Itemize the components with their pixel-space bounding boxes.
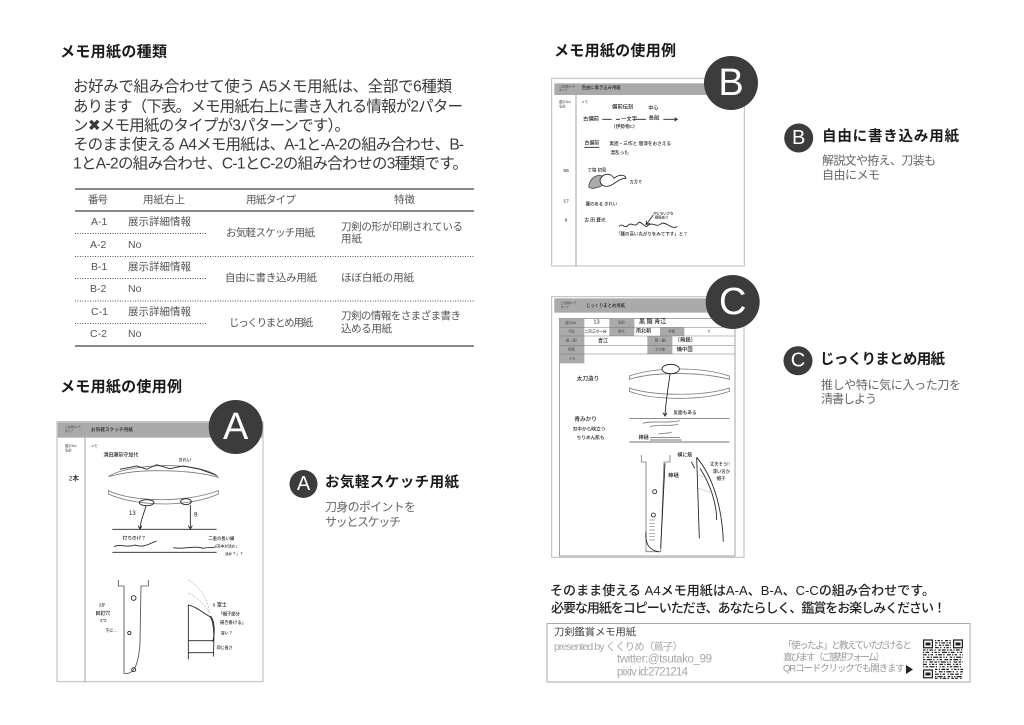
- handwritten notes: 腰のある きれい: [586, 200, 618, 207]
- handwritten notes: （伊勢物C）: [611, 123, 638, 130]
- label: C thorough summary paper: C: [791, 350, 805, 372]
- credit box: 喜びます（ご感想フォーム）: [783, 652, 885, 664]
- label: B free writing paper: 自由にメモ: [822, 168, 880, 182]
- sketch: tang and tip: 同じ長さ: [217, 644, 233, 650]
- handwritten notes: 17: [563, 199, 569, 205]
- credit box: 刀剣鑑賞メモ用紙: [554, 626, 637, 638]
- panel: sample paper A: メモ: [91, 444, 98, 448]
- sketch: tang and tip: 棒樋: [668, 471, 679, 479]
- QR code: [923, 640, 963, 678]
- closing note: そのまま使える A4メモ用紙はA-A、B-A、C-Cの組み合わせです。: [550, 583, 935, 598]
- panel: sample paper C: タイプ: [561, 305, 569, 309]
- table of paper types: 自由に書き込み用紙: [225, 271, 318, 284]
- handwritten notes: 実直・三作と 個漆をおさえる: [609, 140, 671, 147]
- intro paragraph: あります（下表。メモ用紙右上に書き入れる情報が2パター: [73, 98, 463, 116]
- form fields: 南北朝: [636, 328, 651, 335]
- credit box: 「使ったよ」と教えていただけると: [783, 640, 912, 652]
- sketch: blades: 反面もある: [673, 409, 697, 416]
- handwritten notes: 混乱った: [610, 149, 629, 156]
- form fields: 所蔵: [568, 346, 575, 351]
- panel: sample paper A: 2本: [69, 473, 79, 482]
- handwritten notes: 中心: [648, 104, 658, 111]
- intro paragraph: ン✖メモ用紙のタイプが3パターンです）。: [73, 116, 350, 134]
- handwritten notes: 「腰の高い丸がりをみて下す」と？: [616, 230, 688, 237]
- label: B free writing paper: 解説文や拵え、刀装も: [822, 152, 936, 168]
- table of paper types: じっくりまとめ用紙: [229, 316, 314, 329]
- table of paper types: ほぼ白紙の用紙: [341, 271, 414, 284]
- form fields: 黒 鎺 青江: [639, 318, 666, 326]
- sketch: tang and tip: 目釘穴: [95, 610, 110, 617]
- label: A quick sketch paper: [290, 470, 460, 529]
- panel: sample paper B: タイプ: [559, 88, 567, 92]
- table of paper types: 刀剣の形が印刷されている: [341, 220, 463, 233]
- table of paper types: B-2: [90, 283, 106, 295]
- panel: sample paper B: 自由に書き込み用紙: [582, 84, 621, 91]
- form fields: 展示No: [565, 320, 576, 325]
- sketch: blades with arrows: 二重の長い線: [208, 535, 235, 542]
- sketch: tang and tip: 横に筋: [677, 451, 692, 458]
- handwritten notes: カガミ: [629, 178, 642, 185]
- panel: sample paper A: 展示No/: [65, 443, 77, 448]
- sketch: tang and tip: 6 富士: [213, 601, 227, 608]
- sketch: tang and tip: 深い？: [221, 629, 233, 635]
- panel: sample paper A: きれい: [178, 456, 192, 463]
- panel: sample paper A: 二次資料メモ: [65, 425, 81, 429]
- table of paper types: B-1: [91, 261, 108, 273]
- badge C: [706, 275, 760, 329]
- sketch: tang and tip: 帽子: [717, 475, 726, 482]
- handwritten notes: 古備前: [583, 114, 600, 122]
- form fields: 名前: [618, 320, 625, 325]
- closing note: [550, 583, 946, 616]
- form fields: 寸法: [568, 329, 575, 334]
- sketch: blades with arrows: 9: [194, 513, 198, 519]
- form fields: 銘（表）: [566, 338, 579, 343]
- heading: usage example right: メモ用紙の使用例: [554, 42, 676, 60]
- form fields: 備中国: [677, 345, 693, 353]
- table of paper types: 用紙: [341, 232, 362, 245]
- table of paper types: No: [128, 283, 142, 295]
- table of paper types: A-2: [90, 239, 106, 251]
- arrow: [906, 665, 913, 674]
- credit box: pixiv id:2721214: [617, 666, 689, 678]
- label: B free writing paper: 自由に書き込み用紙: [822, 127, 960, 145]
- handwritten notes: 模様あり: [655, 215, 668, 220]
- panel: sample paper A: 清田瀬前守加代: [103, 451, 138, 458]
- table of paper types: 刀剣の情報をさまざま書き: [341, 309, 461, 322]
- panel: sample paper C: 二次資料メモ: [561, 301, 577, 305]
- sketch: blades: [573, 364, 729, 442]
- badge C: C: [719, 281, 746, 323]
- label: C thorough summary paper: 推しや特に気に入った刀を: [821, 377, 961, 392]
- table of paper types: 用紙タイプ: [246, 193, 296, 206]
- panel: sample paper A: 名前: [65, 447, 72, 452]
- form fields: 時代: [618, 329, 625, 334]
- sketch: tang and tip: [641, 451, 731, 552]
- handwritten notes: 備前伝刻: [612, 103, 633, 111]
- handwritten notes: 一文字: [621, 114, 637, 122]
- label: A quick sketch paper: サッとスケッチ: [325, 515, 401, 529]
- sketch: tang and tip: 下に…: [105, 628, 118, 634]
- table of paper types: 展示詳細情報: [128, 215, 192, 228]
- form fields: 銘（裏）: [655, 338, 668, 343]
- handwritten notes: 55: [563, 168, 569, 174]
- table of paper types: No: [128, 239, 142, 251]
- sketch: blades with arrows: 13: [129, 511, 136, 517]
- table of paper types: C-1: [91, 306, 108, 318]
- label: A quick sketch paper: A: [297, 473, 311, 495]
- label: A quick sketch paper: お気軽スケッチ用紙: [325, 473, 460, 491]
- table of paper types: 特徴: [394, 193, 416, 206]
- form fields: 13: [593, 320, 600, 326]
- form fields: 青江: [598, 337, 608, 344]
- handwritten notes: 長船: [649, 114, 660, 122]
- panel: sample paper A: [57, 422, 263, 682]
- form fields: ?: [708, 329, 711, 334]
- panel: sample paper C: じっくりまとめ用紙: [586, 302, 626, 309]
- badge A: A: [223, 406, 249, 448]
- sketch: blades with arrows: 打ちのけ？: [123, 534, 146, 541]
- handwritten notes: 中にちいさな: [653, 211, 674, 216]
- sketch: blades: 青みかり: [574, 415, 597, 423]
- table of paper types: A-1: [91, 216, 108, 228]
- badge B: B: [718, 62, 744, 104]
- table of paper types: 展示詳細情報: [128, 305, 192, 318]
- sketch: blades with arrows: 活か？」？: [225, 551, 243, 556]
- panel: sample paper B: 二次資料メモ: [559, 84, 575, 88]
- handwritten notes: 古備前: [584, 139, 599, 146]
- handwritten notes: 古 田 蒼光: [584, 216, 606, 223]
- label: C thorough summary paper: じっくりまとめ用紙: [820, 350, 946, 368]
- form fields: [559, 318, 735, 556]
- closing note: 必要な用紙をコピーいただき、あなたらしく、鑑賞をお楽しみください！: [551, 600, 946, 616]
- sketch: blades: 棒樋: [639, 434, 649, 441]
- form fields: メモ: [569, 356, 576, 360]
- sketch: tang and tip: 「帽子部分: [218, 610, 241, 617]
- table of paper types: C-2: [90, 328, 107, 340]
- intro paragraph: そのまま使える A4メモ用紙は、A-1と-A-2の組み合わせ、B-: [73, 136, 464, 154]
- credit box: QRコードクリックでも開きます: [783, 664, 905, 674]
- label: B free writing paper: [784, 124, 960, 182]
- table of paper types: 込める用紙: [341, 322, 392, 335]
- form fields: （無銘）: [675, 336, 696, 344]
- badge B: [704, 56, 758, 110]
- table of paper types: 用紙右上: [143, 193, 185, 206]
- table of paper types: 番号: [88, 194, 108, 206]
- label: C thorough summary paper: [784, 346, 961, 406]
- sketch: blades with arrows: [108, 465, 243, 556]
- table of paper types: 展示詳細情報: [128, 260, 192, 273]
- handwritten notes: 丁塩 初見: [588, 166, 607, 173]
- sketch: blades with arrows: 「刃中が活か」: [213, 544, 239, 549]
- panel: sample paper A: お気軽スケッチ用紙: [91, 426, 133, 433]
- table of paper types: No: [128, 328, 142, 340]
- credit box: [547, 624, 970, 682]
- panel: sample paper B: メモ: [581, 100, 589, 104]
- sketch: blades: 刃中から映立つ: [573, 425, 606, 432]
- sketch: tang and tip: 丈夫そう!!: [710, 460, 730, 467]
- label: B free writing paper: B: [792, 127, 805, 149]
- panel: sample paper B: 名前: [559, 103, 566, 108]
- handwritten notes: 9: [565, 217, 568, 223]
- sketch: tang and tip: 3つ: [100, 618, 107, 623]
- panel: sample paper A: タイプ: [65, 429, 73, 433]
- sketch: blades: ちりめん肌も: [577, 434, 605, 441]
- sketch: blades: 太刀造り: [577, 375, 599, 383]
- intro paragraph: [73, 78, 468, 172]
- intro paragraph: お好みで組み合わせて使う A5メモ用紙は、全部で6種類: [73, 78, 452, 96]
- table of paper types: お気軽スケッチ用紙: [226, 226, 316, 239]
- credit box: twitter:@tsutako_99: [617, 654, 712, 666]
- form fields: 作者: [668, 329, 676, 334]
- sketch: tang and tip: 掃き掛ける」: [220, 619, 246, 626]
- sketch: tang and tip: [95, 580, 246, 674]
- heading: memo paper types: メモ用紙の種類: [60, 42, 167, 60]
- sketch: tang and tip: 3か: [99, 601, 106, 608]
- form fields: 二尺三寸一分: [585, 329, 607, 334]
- heading: usage example left: メモ用紙の使用例: [60, 378, 182, 396]
- form fields: その他: [655, 347, 666, 352]
- panel: sample paper B: [552, 78, 744, 266]
- credit box: presented by くくりめ（蔦子）: [554, 641, 683, 653]
- handwritten notes: [563, 103, 688, 237]
- label: C thorough summary paper: 清書しよう: [821, 392, 877, 406]
- intro paragraph: 1とA-2の組み合わせ、C-1とC-2の組み合わせの3種類です。: [73, 154, 468, 172]
- panel: sample paper B: 展示No/: [559, 99, 571, 104]
- panel: sample paper C: [552, 297, 744, 557]
- badge A: [209, 400, 263, 454]
- sketch: tang and tip: 深い刃か: [713, 468, 731, 475]
- label: A quick sketch paper: 刀身のポイントを: [325, 499, 416, 514]
- table of paper types: [75, 189, 474, 346]
